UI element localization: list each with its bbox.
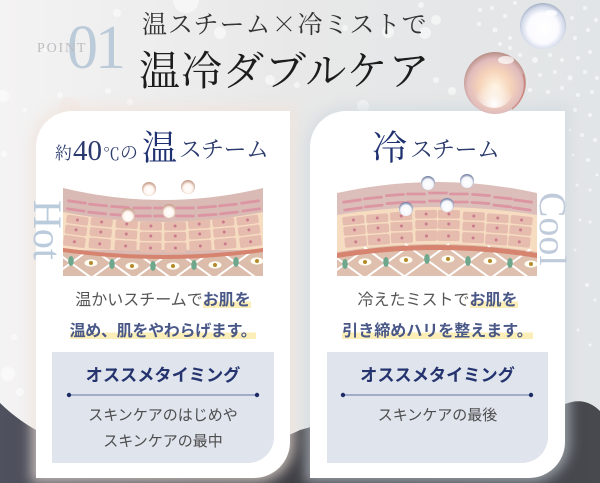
divider with dots <box>66 392 260 398</box>
panel: warm steam card <box>36 111 290 478</box>
heading: warm steam: 温 <box>142 129 177 168</box>
decorative bubble: iridescent <box>520 3 566 49</box>
heading: warm steam: の <box>120 143 138 163</box>
timing text line 2: スキンケアの最中 <box>103 433 223 450</box>
title line 2: 温冷ダブルケア <box>139 38 431 97</box>
panel: recommended timing <box>327 352 548 463</box>
skin diagram: cool <box>337 174 537 276</box>
heading: warm steam: ℃ <box>103 140 120 165</box>
panel: cool mist card <box>310 111 565 478</box>
timing text: スキンケアのはじめや <box>88 407 238 424</box>
timing text: スキンケアの最後 <box>378 407 497 424</box>
heading: warm steam: 40 <box>73 135 102 167</box>
skin diagram: warm <box>63 180 263 276</box>
body text: cool mist: 冷えたミストでお肌を <box>357 292 518 309</box>
point label: POINT <box>37 41 87 56</box>
body text: warm steam: 温かいスチームでお肌を <box>75 292 251 309</box>
heading: warm steam: 約 <box>55 144 72 163</box>
body text: cool mist line 2: 引き締めハリを整えます。 <box>342 323 533 340</box>
heading: cool steam: スチーム <box>410 137 500 162</box>
heading: cool steam: 冷 <box>372 129 407 168</box>
heading: cool steam <box>372 129 500 168</box>
divider with dots <box>340 392 534 398</box>
heading: warm steam: スチーム <box>179 137 269 162</box>
body text: warm steam line 2: 温め、肌をやわらげます。 <box>70 323 256 340</box>
panel: recommended timing <box>52 352 274 463</box>
title line 1: 温スチーム×冷ミストで <box>142 5 428 41</box>
decorative bubble: peach <box>464 52 526 114</box>
heading: warm steam <box>55 129 269 168</box>
timing heading: オススメタイミング <box>86 365 240 385</box>
timing heading: オススメタイミング <box>360 365 515 385</box>
point number 01: 01 <box>67 14 123 82</box>
